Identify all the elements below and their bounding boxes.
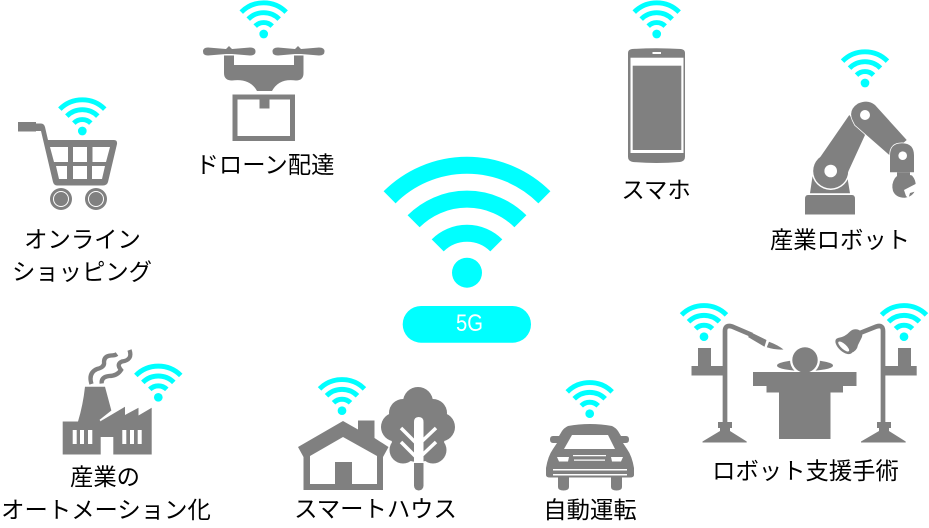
- icon: car: [546, 424, 634, 490]
- icon: wifi signal over robot: [843, 52, 887, 87]
- label: industrial automation: [1, 464, 211, 523]
- label: drone delivery: ドローン配達: [196, 152, 334, 178]
- label: smartphone: スマホ: [621, 177, 691, 203]
- label: self-driving car: 自動運転: [543, 497, 637, 523]
- label: industrial automation: 産業の: [70, 464, 140, 490]
- icon: shopping cart: [18, 122, 117, 210]
- panel: self-driving car: [543, 383, 637, 523]
- icon: wifi signal right: [882, 306, 926, 341]
- panel: smartphone: [621, 3, 691, 203]
- icon: right robot arm with lamp: [833, 326, 917, 442]
- icon: tree: [381, 387, 455, 490]
- icon: central 5G wifi signal: [390, 165, 544, 288]
- icon: robot arm: [805, 102, 917, 214]
- panel: industrial automation: [1, 350, 211, 523]
- label: robot-assisted surgery: ロボット支援手術: [712, 458, 899, 484]
- icon: wifi signal over phone: [634, 3, 679, 38]
- icon: house: [298, 420, 388, 490]
- label: online shopping: オンライン: [24, 226, 141, 252]
- label: online shopping: [12, 226, 152, 285]
- panel: online shopping: [12, 100, 152, 285]
- icon: patient on table: [753, 345, 856, 439]
- label: industrial robot: 産業ロボット: [770, 227, 910, 253]
- panel: drone delivery: [196, 3, 334, 178]
- icon: wifi signal left: [682, 306, 726, 341]
- icon: wifi signal over factory: [136, 366, 181, 402]
- icon: wifi signal over drone: [241, 3, 286, 38]
- icon: wifi signal over car: [567, 383, 612, 418]
- panel: industrial robot: [770, 52, 917, 253]
- 5G badge: [403, 306, 531, 343]
- panel: robot-assisted surgery: [682, 306, 926, 484]
- icon: delivery drone: [203, 46, 324, 141]
- label: smart house: スマートハウス: [294, 496, 457, 522]
- icon: wifi signal over cart: [60, 100, 105, 135]
- panel: smart house: [294, 380, 457, 522]
- icon: wifi signal over house: [320, 380, 364, 415]
- icon: factory: [63, 350, 152, 454]
- label: industrial automation: オートメーション化: [1, 497, 211, 523]
- icon: left robot arm with scalpel: [692, 326, 784, 442]
- icon: smartphone: [628, 48, 685, 163]
- 5G badge: 5G: [456, 310, 483, 337]
- label: online shopping: ショッピング: [12, 259, 152, 285]
